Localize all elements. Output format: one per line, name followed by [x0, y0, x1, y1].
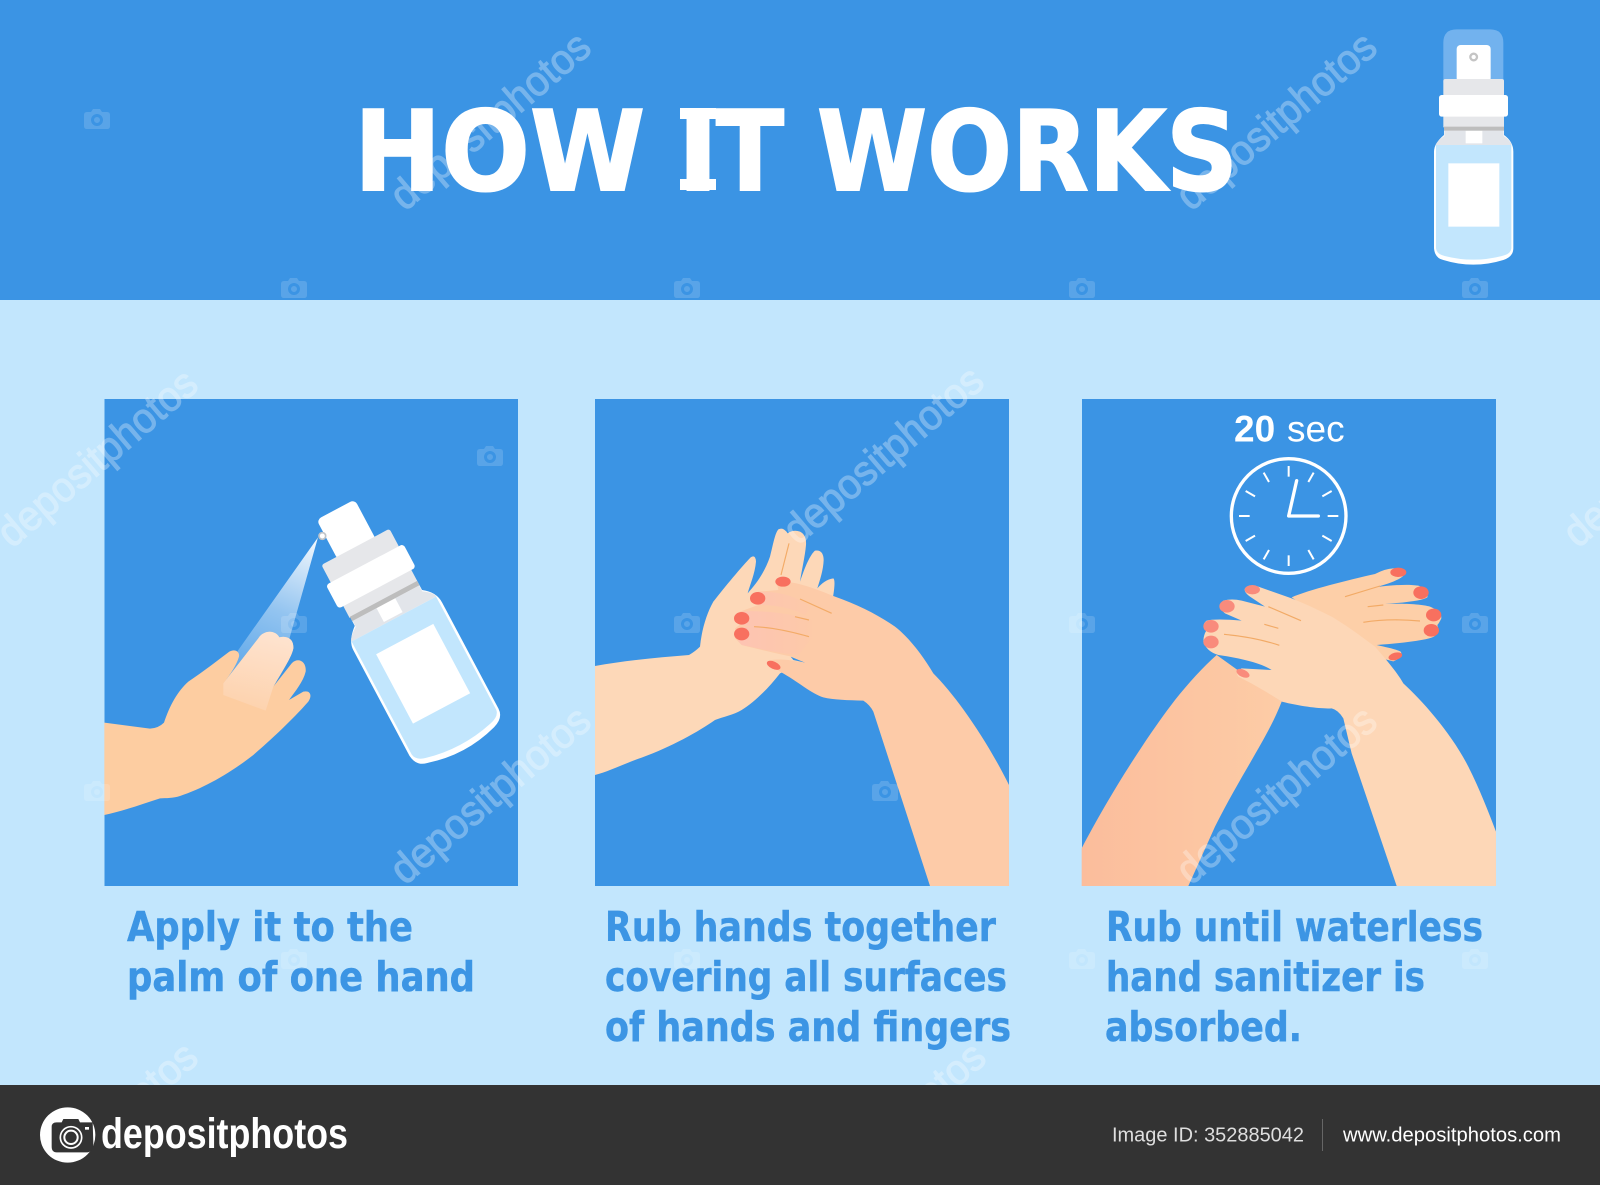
panel 2 background [595, 399, 1009, 886]
nails [734, 577, 791, 672]
timer label: sec [1287, 409, 1345, 450]
caption 2 [605, 903, 1011, 1051]
fingers tint [754, 592, 812, 615]
caption 3 [1105, 903, 1483, 1051]
illustration: clock and crossed hands [1082, 459, 1496, 886]
watermark overlay: depositphotos [380, 696, 599, 893]
website: www.depositphotos.com [1342, 1124, 1561, 1146]
caption 3: hand sanitizer is [1106, 953, 1425, 1001]
nozzle hole [319, 533, 326, 539]
watermark overlay: depositphotos [380, 22, 599, 219]
caption 2: Rub hands together [605, 903, 997, 951]
caption 3: Rub until waterless [1106, 903, 1483, 951]
lower hand [595, 529, 834, 775]
header band [0, 0, 1600, 300]
timer label: 20 [1234, 409, 1275, 450]
icon: spray bottle in header [1434, 29, 1513, 265]
clock [1231, 459, 1346, 573]
icon: camera logo [40, 1107, 95, 1163]
hand [104, 632, 310, 815]
spray mist [223, 537, 318, 683]
title: T [716, 88, 784, 217]
panel 1 background [104, 399, 518, 886]
illustration: hand and spray bottle [104, 486, 508, 815]
panel 3: wait [1082, 399, 1496, 886]
caption 2: covering all surfaces [605, 953, 1007, 1001]
nails [1203, 568, 1441, 680]
caption 1: palm of one hand [127, 953, 475, 1001]
image id: Image ID: 352885042 [1112, 1124, 1304, 1146]
caption 1: Apply it to the [127, 903, 413, 951]
title: HOW [354, 88, 645, 217]
upper hand [735, 582, 1009, 886]
caption 3: absorbed. [1105, 1003, 1302, 1051]
caption 2: of hands and fingers [605, 1003, 1011, 1051]
illustration: hands rubbing [595, 529, 1009, 886]
watermark overlay: depositphotos [773, 356, 992, 553]
watermark overlay: depositphotos [1166, 22, 1385, 219]
watermark overlay: depositphotos [1166, 696, 1385, 893]
title: I [677, 88, 719, 217]
front hand and arm [1203, 586, 1496, 886]
separator [1322, 1119, 1323, 1151]
caption 1 [127, 903, 475, 1001]
title [354, 88, 1238, 217]
creases [754, 543, 832, 637]
panel 2: rub hands [595, 399, 1009, 886]
bottle [291, 486, 508, 774]
back hand [1292, 568, 1441, 661]
creases [1224, 586, 1420, 645]
panel 3 background [1082, 399, 1496, 886]
footer bar [0, 1085, 1600, 1185]
panel 1: apply [104, 399, 518, 886]
sprayed finger highlight [223, 632, 293, 711]
title: WORKS [817, 88, 1238, 217]
logo wordmark: depositphotos [101, 1110, 348, 1158]
back arm [1082, 655, 1282, 886]
